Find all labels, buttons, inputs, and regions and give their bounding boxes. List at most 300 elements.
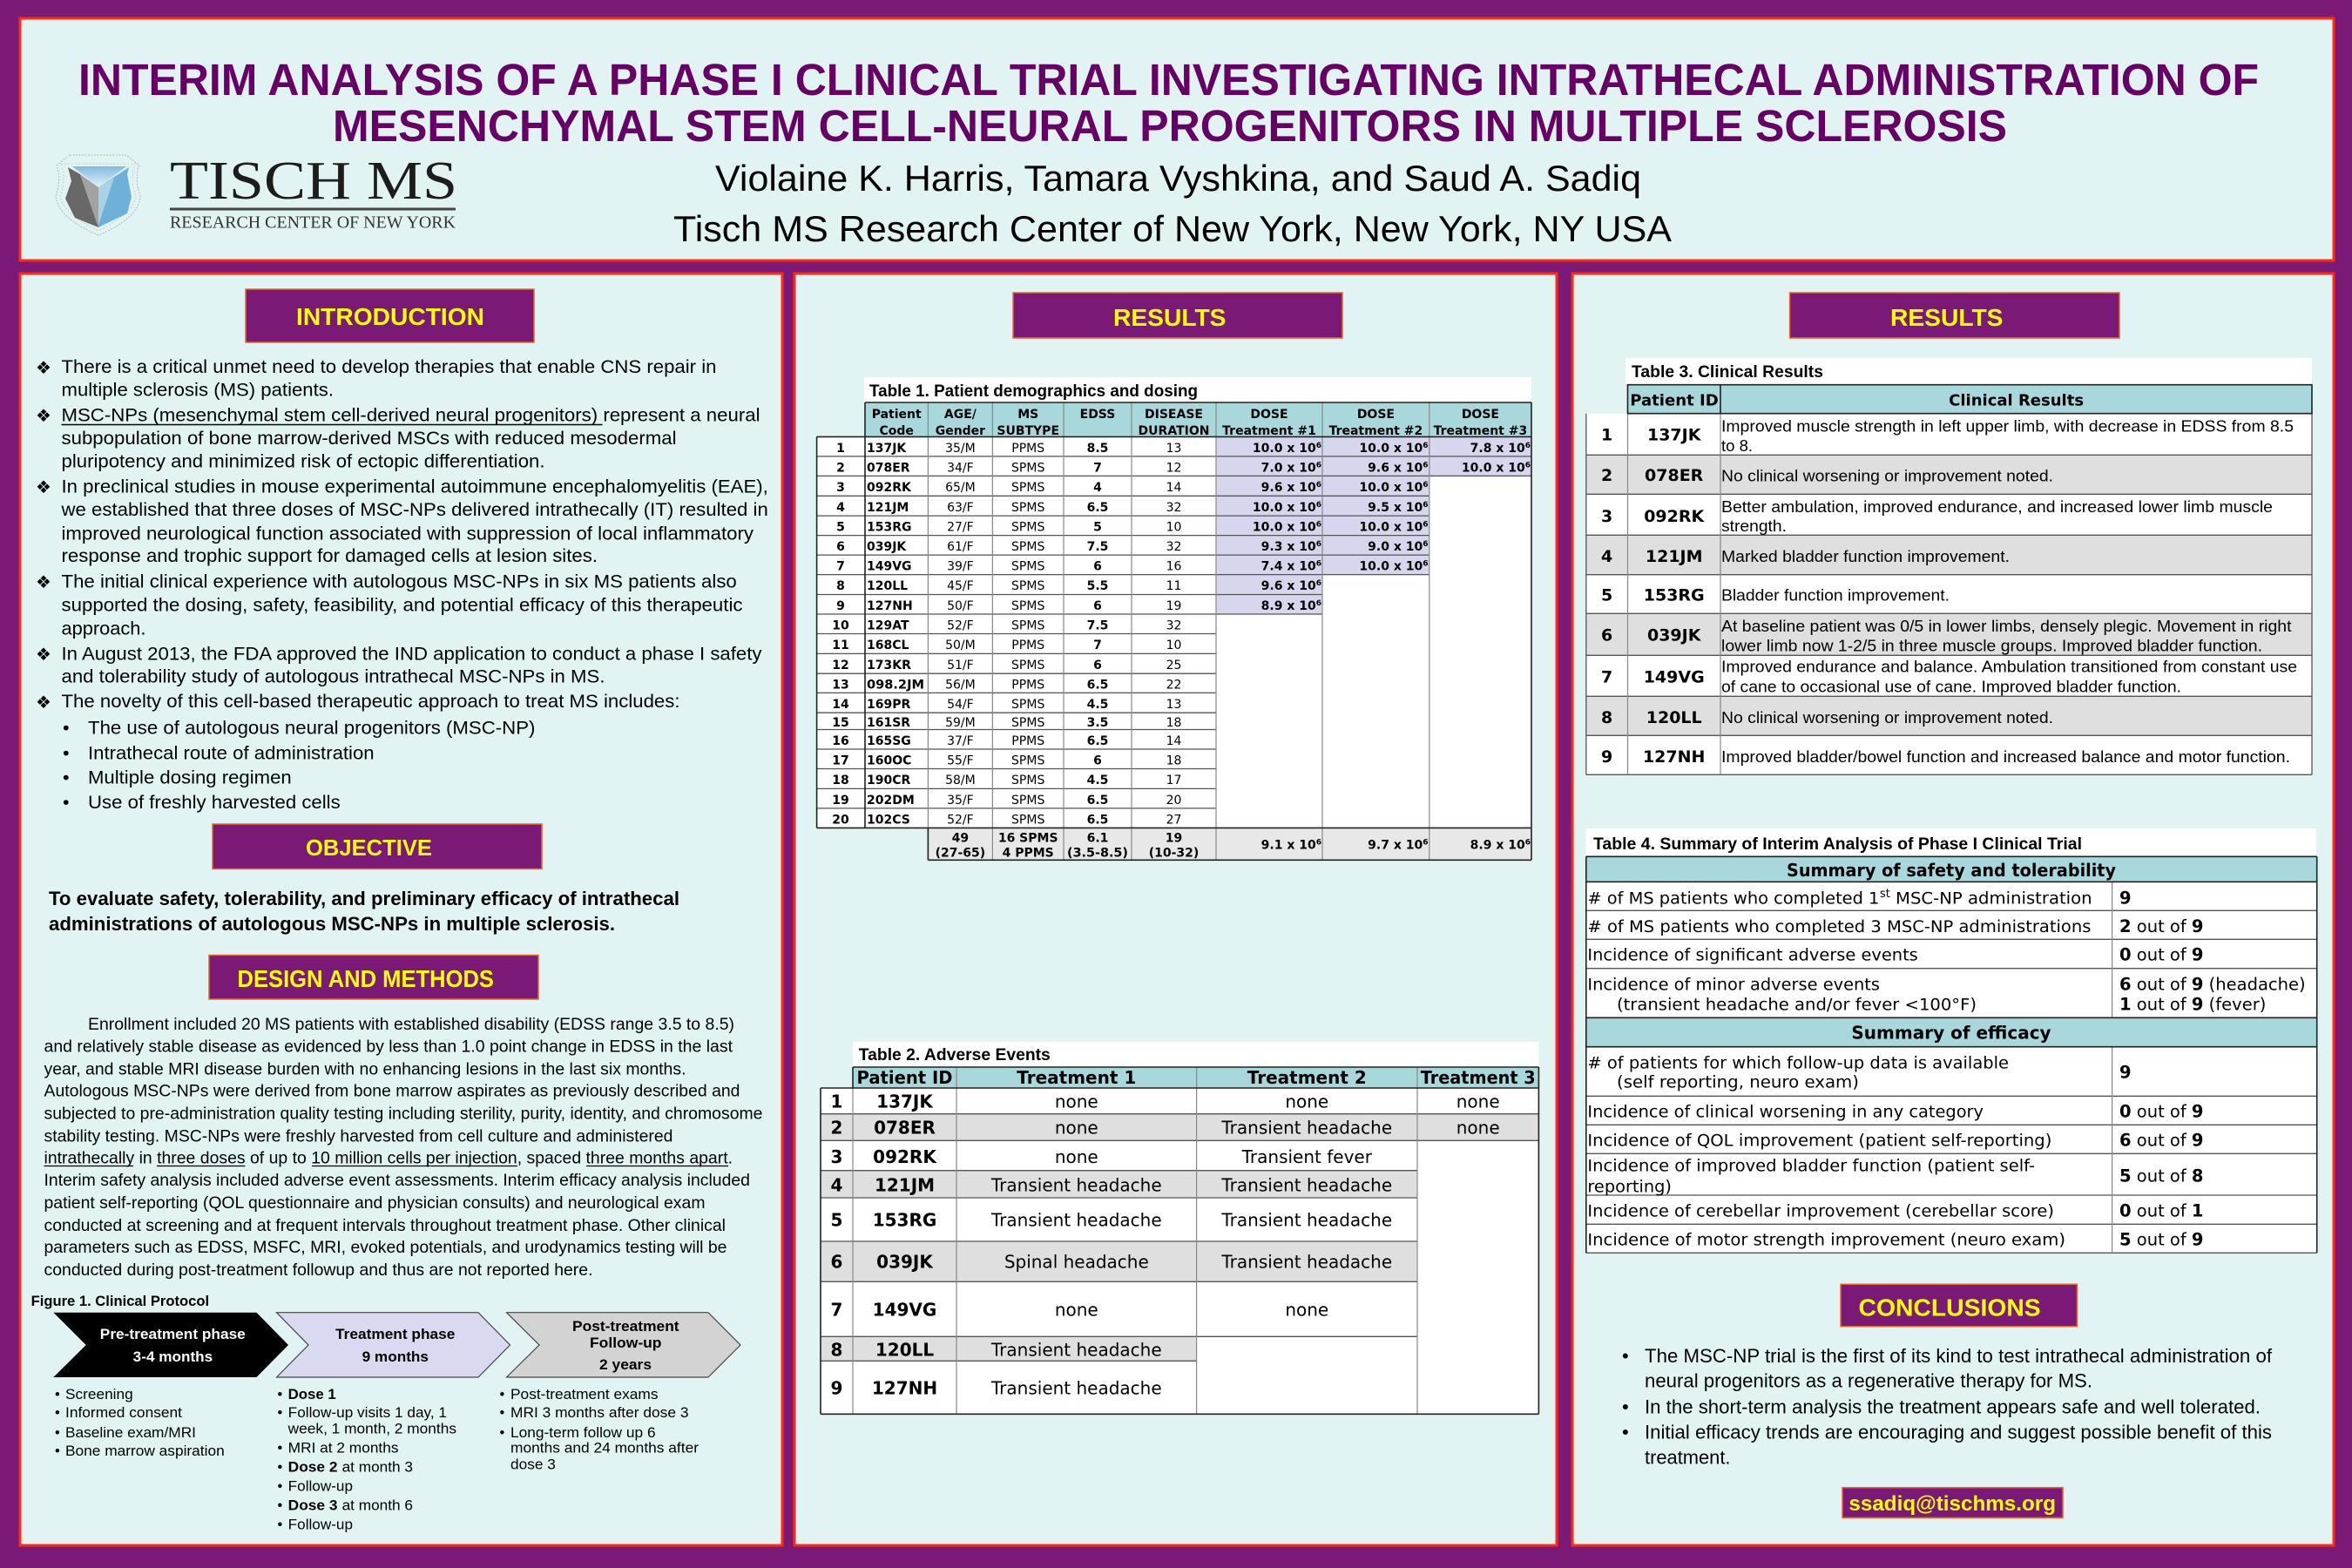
table 2 patient rows: 127NH bbox=[872, 1378, 937, 1399]
table 1 summary row: 6 bbox=[1316, 839, 1321, 848]
table 2 header row: Treatment 2 bbox=[1247, 1067, 1367, 1088]
table 1 summary row: 16 SPMS bbox=[998, 832, 1058, 846]
text block: introduction bullets: • bbox=[63, 767, 70, 787]
table 4: summary of interim analysis: Table 4. Summary of Interim Analysis of Phase I Clinical Trial bbox=[1593, 835, 2082, 854]
table 1 patient rows: 129AT bbox=[867, 618, 909, 632]
table 1 patient rows: 6 bbox=[1316, 481, 1321, 490]
table 1 patient rows: SPMS bbox=[1011, 579, 1044, 593]
table 1 patient rows: 22 bbox=[1166, 679, 1181, 693]
table 4 efficacy rows: Incidence of motor strength improvement (neuro exam) bbox=[1587, 1232, 2065, 1250]
table 1 patient rows: 7 bbox=[1093, 639, 1102, 652]
table 1 patient rows: 7 bbox=[836, 560, 845, 574]
text block: conclusions bbox=[1622, 1345, 2273, 1469]
table 4 efficacy rows: 5 out of 8 bbox=[2119, 1166, 2203, 1186]
table 3 patient ids: 3 bbox=[1601, 507, 1612, 526]
list: treatment steps: at month 6 bbox=[342, 1498, 413, 1514]
table 1 patient rows: SPMS bbox=[1011, 461, 1044, 475]
text block: conclusions: • bbox=[1622, 1396, 1629, 1418]
table 1 summary row: 9.7 x 10 bbox=[1368, 839, 1423, 853]
text block: conclusions: • bbox=[1622, 1422, 1629, 1443]
table 1 patient rows: 17 bbox=[1166, 774, 1181, 787]
table 1 header row: AGE/ bbox=[944, 408, 977, 422]
table 1 patient rows: 25 bbox=[1166, 659, 1181, 672]
table 1 patient rows: 6 bbox=[1316, 579, 1321, 588]
table 2 patient rows: none bbox=[1055, 1092, 1098, 1112]
text block: introduction bullets: Intrathecal route of administration bbox=[88, 742, 375, 763]
heading: design and methods bbox=[209, 955, 538, 999]
text block: introduction bullets: supported the dosing, safety, feasibility, and potential efficacy of this therapeutic bbox=[61, 594, 743, 615]
table 1 patient rows: 5 bbox=[836, 521, 845, 535]
table 4 safety rows: st bbox=[1880, 888, 1890, 901]
list: pre-treatment steps: • bbox=[55, 1443, 60, 1459]
table 4 efficacy rows: Incidence of QOL improvement (patient self-reporting) bbox=[1587, 1132, 2051, 1151]
text block: introduction bullets: improved neurological function associated with suppression of local inflammatory bbox=[61, 523, 754, 544]
table 2 patient rows: 4 bbox=[831, 1175, 842, 1196]
table 1 patient rows: 6 bbox=[1093, 599, 1102, 613]
text block: design and methods: patient self-reporting (QOL questionnaire and physician consults) and neurological exam bbox=[44, 1193, 706, 1213]
table 1 patient rows: 10 bbox=[832, 618, 849, 632]
table 1 patient rows: 56/M bbox=[945, 679, 976, 693]
logo wordmark: TISCH MS bbox=[170, 152, 457, 211]
table 1 header row: DURATION bbox=[1139, 424, 1209, 438]
authors: Violaine K. Harris, Tamara Vyshkina, and Saud A. Sadiq bbox=[715, 158, 1641, 199]
table 2 patient rows: 121JM bbox=[875, 1175, 935, 1196]
table 3 clinical result text: to 8. bbox=[1721, 436, 1753, 455]
table 1 patient rows: 6 bbox=[1316, 599, 1321, 608]
text block: introduction bullets: approach. bbox=[61, 618, 146, 639]
table 1 patient rows: 19 bbox=[832, 794, 849, 808]
table 1 patient rows: 17 bbox=[832, 754, 849, 768]
heading: introduction: INTRODUCTION bbox=[296, 303, 484, 330]
table 1 patient rows: 098.2JM bbox=[867, 679, 924, 693]
heading: results bbox=[1790, 293, 2119, 338]
arrow: pre-treatment phase bbox=[53, 1313, 288, 1377]
table 1 patient rows: 9.6 x 10 bbox=[1261, 579, 1316, 593]
table 1 summary row: 49 bbox=[952, 832, 969, 846]
table 3: clinical results bbox=[1586, 358, 2312, 774]
table 1 patient rows: 32 bbox=[1166, 618, 1181, 632]
table 1 patient rows: 6 bbox=[1093, 560, 1102, 574]
text block: introduction bullets: ❖ bbox=[36, 357, 51, 378]
table 1 patient rows: 8.5 bbox=[1087, 442, 1108, 456]
table 1 patient rows: 32 bbox=[1166, 540, 1181, 554]
table 1 patient rows: 168CL bbox=[867, 639, 909, 652]
table 3 clinical result text: No clinical worsening or improvement noted. bbox=[1721, 467, 2053, 485]
arrow: post-treatment follow-up: 2 years bbox=[599, 1357, 652, 1373]
table 1 patient rows: 5.5 bbox=[1087, 579, 1108, 593]
table 1 patient rows: 078ER bbox=[867, 461, 910, 475]
table 1 patient rows: 3.5 bbox=[1087, 716, 1108, 730]
table 3 patient ids: 092RK bbox=[1644, 507, 1705, 526]
table 2: adverse events bbox=[821, 1042, 1538, 1414]
table 1 summary row: 6 bbox=[1423, 839, 1429, 848]
table 1 patient rows: 58/M bbox=[945, 774, 976, 787]
table 1 header row: DOSE bbox=[1462, 408, 1499, 422]
table 1 header row: Gender bbox=[936, 424, 985, 438]
table 1 patient rows: 7.0 x 10 bbox=[1261, 461, 1316, 475]
table 3 clinical result text bbox=[1721, 417, 2297, 766]
table 1 patient rows: 9 bbox=[836, 599, 845, 613]
table 1 header row: Treatment #1 bbox=[1222, 424, 1316, 438]
table 2 patient rows: 1 bbox=[831, 1092, 842, 1112]
text block: introduction bullets: The initial clinical experience with autologous MSC-NPs in six MS patients also bbox=[61, 571, 737, 591]
table 1 patient rows: 15 bbox=[832, 716, 849, 730]
table 1 header row: Patient bbox=[872, 408, 922, 422]
table 1 patient rows: PPMS bbox=[1011, 734, 1044, 748]
list: treatment steps: • bbox=[277, 1387, 282, 1402]
text block: conclusions: The MSC-NP trial is the first of its kind to test intrathecal administration of bbox=[1645, 1345, 2273, 1367]
table 3 patient ids: 039JK bbox=[1647, 626, 1702, 645]
table 1 patient rows: 6.5 bbox=[1087, 734, 1108, 748]
table 4 safety rows: 2 out of 9 bbox=[2119, 916, 2203, 936]
table 4 efficacy rows: reporting) bbox=[1587, 1178, 1672, 1196]
table 1 patient rows: 16 bbox=[1166, 560, 1181, 574]
table 1 patient rows: 7.5 bbox=[1087, 618, 1108, 632]
table 1 patient rows: SPMS bbox=[1011, 774, 1044, 787]
table 3 patient ids: 127NH bbox=[1643, 747, 1705, 767]
table 3 header row: Clinical Results bbox=[1949, 392, 2084, 410]
table 1 header row: Treatment #2 bbox=[1329, 424, 1423, 438]
contact email: ssadiq@tischms.org bbox=[1848, 1492, 2056, 1516]
table 2 patient rows: Transient headache bbox=[1220, 1252, 1392, 1273]
table 2 patient rows: 153RG bbox=[873, 1210, 936, 1231]
table 2 patient rows: Transient headache bbox=[1220, 1210, 1392, 1231]
table 2 patient rows: 149VG bbox=[873, 1300, 936, 1321]
table 1 patient rows: 160OC bbox=[867, 754, 911, 768]
table 1 patient rows: 6 bbox=[1316, 501, 1321, 510]
table 3 header row: Patient ID bbox=[1630, 392, 1719, 410]
table 1 patient rows: 14 bbox=[1166, 481, 1181, 495]
table 1 patient rows: 18 bbox=[832, 774, 849, 787]
table 4 safety rows: 0 out of 9 bbox=[2119, 945, 2203, 965]
text block: introduction bullets: In preclinical studies in mouse experimental autoimmune encephalomyelitis (EAE), bbox=[61, 476, 768, 497]
table 1 patient rows: 10.0 x 10 bbox=[1359, 442, 1423, 456]
table 1 patient rows: 9.0 x 10 bbox=[1368, 540, 1423, 554]
table 1 header row: EDSS bbox=[1080, 408, 1115, 422]
text block: introduction bullets: The novelty of this cell-based therapeutic approach to treat MS includes: bbox=[61, 691, 679, 712]
text block: design and methods: subjected to pre-administration quality testing including sterility, purity, identity, and chromosome bbox=[44, 1105, 763, 1124]
table 1 patient rows: 14 bbox=[1166, 734, 1181, 748]
logo wordmark: RESEARCH CENTER OF NEW YORK bbox=[170, 214, 456, 232]
table 1 patient rows: 27/F bbox=[947, 521, 974, 535]
text block: introduction bullets bbox=[36, 356, 768, 813]
list: treatment steps: MRI at 2 months bbox=[288, 1441, 399, 1456]
text block: introduction bullets: There is a critical unmet need to develop therapies that enable CNS repair in bbox=[61, 356, 716, 377]
table 2 patient rows: 5 bbox=[831, 1210, 842, 1231]
table 1 patient rows: 34/F bbox=[947, 461, 974, 475]
list: post-treatment steps: dose 3 bbox=[510, 1457, 556, 1473]
table 1 patient rows: 13 bbox=[832, 679, 849, 693]
table 1 patient rows: 5 bbox=[1093, 521, 1102, 535]
table 1 patient rows: 37/F bbox=[947, 734, 974, 748]
table 1 patient rows: 7.5 bbox=[1087, 540, 1108, 554]
list: post-treatment steps bbox=[500, 1387, 700, 1473]
list: treatment steps: Follow-up bbox=[288, 1517, 353, 1533]
list: post-treatment steps: • bbox=[500, 1425, 505, 1441]
table 1 patient rows: 50/F bbox=[947, 599, 974, 613]
text block: design and methods: conducted at screening and at frequent intervals throughout treatment phase. Other clinical bbox=[44, 1216, 726, 1235]
heading: conclusions: CONCLUSIONS bbox=[1859, 1294, 2041, 1321]
table 1 patient rows: 039JK bbox=[867, 540, 907, 554]
table 1 patient rows: 9.3 x 10 bbox=[1261, 540, 1316, 554]
table 1 patient rows: 6 bbox=[1316, 461, 1321, 470]
arrow: treatment phase bbox=[277, 1313, 510, 1377]
text block: introduction bullets: and tolerability study of autologous intrathecal MSC-NPs in MS. bbox=[61, 666, 605, 686]
table 3 patient ids: 9 bbox=[1601, 747, 1612, 767]
table 4 section heading: safety: Summary of safety and tolerability bbox=[1787, 860, 2116, 881]
table 3 clinical result text: of cane to occasional use of cane. Improved bladder function. bbox=[1721, 678, 2181, 696]
table 3: clinical results: Table 3. Clinical Results bbox=[1632, 363, 1823, 382]
table 1 patient rows: 2 bbox=[836, 461, 845, 475]
table 1 patient rows: 52/F bbox=[947, 618, 974, 632]
table 4 safety rows: # of MS patients who completed 1 bbox=[1587, 889, 1879, 908]
title: INTERIM ANALYSIS OF A PHASE I CLINICAL TRIAL INVESTIGATING INTRATHECAL ADMINISTRATION OF bbox=[78, 55, 2259, 105]
list: post-treatment steps: • bbox=[500, 1387, 505, 1402]
list: post-treatment steps: Post-treatment exams bbox=[510, 1387, 659, 1402]
table 1 patient rows: SPMS bbox=[1011, 540, 1044, 554]
table 4 efficacy rows: Incidence of cerebellar improvement (cerebellar score) bbox=[1587, 1203, 2054, 1221]
table 1 patient rows: 10 bbox=[1166, 639, 1181, 652]
table 1 header row: Code bbox=[879, 424, 914, 438]
table 1 patient rows: 10.0 x 10 bbox=[1359, 560, 1423, 574]
table 1 summary row: 19 bbox=[1166, 832, 1182, 846]
table 1 patient rows: 6 bbox=[1316, 521, 1321, 530]
table 4 safety rows: (transient headache and/or fever <100°F) bbox=[1617, 996, 1977, 1014]
text block: conclusions: • bbox=[1622, 1345, 1629, 1367]
text block: conclusions: treatment. bbox=[1645, 1447, 1730, 1469]
arrow: post-treatment follow-up: Follow-up bbox=[590, 1335, 662, 1351]
text block: design and methods bbox=[44, 1015, 763, 1280]
table 1 patient rows: 10 bbox=[1166, 521, 1181, 535]
arrow: pre-treatment phase: Pre-treatment phase bbox=[100, 1327, 246, 1342]
table 1 summary row bbox=[936, 832, 1531, 860]
table 2 patient rows: none bbox=[1456, 1118, 1500, 1139]
table 1 summary row: 6 bbox=[1525, 839, 1531, 848]
table 1 patient rows: 127NH bbox=[867, 599, 913, 613]
list: pre-treatment steps: Baseline exam/MRI bbox=[65, 1425, 196, 1441]
table 1 patient rows: 4.5 bbox=[1087, 774, 1108, 787]
table 4 efficacy rows: Incidence of improved bladder function (patient self- bbox=[1587, 1158, 2035, 1176]
table 1 patient rows: 6 bbox=[836, 540, 845, 554]
heading: introduction bbox=[246, 289, 534, 342]
text block: introduction bullets: ❖ bbox=[36, 692, 51, 713]
list: pre-treatment steps: Bone marrow aspiration bbox=[65, 1443, 225, 1459]
table 2 patient rows: Transient headache bbox=[990, 1175, 1162, 1196]
table 1 patient rows: 4 bbox=[836, 501, 845, 515]
table 3 patient ids: 078ER bbox=[1645, 466, 1704, 485]
table 1 patient rows: 153RG bbox=[867, 521, 911, 535]
table 2 patient rows: Transient headache bbox=[1220, 1118, 1392, 1139]
table 1: patient demographics and dosing bbox=[817, 377, 1531, 860]
table 1 patient rows: 6 bbox=[1525, 461, 1531, 470]
logo wordmark bbox=[170, 152, 457, 232]
arrow: pre-treatment phase: 3-4 months bbox=[133, 1349, 213, 1365]
table 4 efficacy rows: 9 bbox=[2119, 1062, 2132, 1082]
table 3 clinical result text: At baseline patient was 0/5 in lower limbs, densely plegic. Movement in right bbox=[1721, 617, 2291, 635]
table 4 efficacy rows: Incidence of clinical worsening in any category bbox=[1587, 1104, 1984, 1122]
table 3 patient ids: 6 bbox=[1601, 626, 1612, 645]
table 1 patient rows: 6 bbox=[1423, 442, 1429, 450]
table 1 patient rows: 10.0 x 10 bbox=[1253, 521, 1316, 535]
table 2 patient rows: Transient fever bbox=[1241, 1146, 1373, 1167]
list: post-treatment steps: Long-term follow up 6 bbox=[510, 1425, 656, 1441]
list: treatment steps: Dose 1 bbox=[288, 1387, 336, 1402]
table 1 patient rows: 10.0 x 10 bbox=[1359, 521, 1423, 535]
text block: introduction bullets: • bbox=[63, 718, 70, 739]
table 1 patient rows: 8 bbox=[836, 579, 845, 593]
table 1 patient rows: 13 bbox=[1166, 442, 1181, 456]
table 1 patient rows: 6 bbox=[1316, 540, 1321, 549]
table 1 patient rows: 55/F bbox=[947, 754, 974, 768]
text block: objective bbox=[49, 888, 679, 935]
table 1 patient rows bbox=[832, 442, 1531, 827]
table 3 patient ids: 4 bbox=[1601, 547, 1612, 566]
table 1 patient rows: 6.5 bbox=[1087, 813, 1108, 827]
table 1 patient rows: 7.4 x 10 bbox=[1261, 560, 1316, 574]
list: pre-treatment steps: • bbox=[55, 1387, 60, 1402]
list: treatment steps: Follow-up visits 1 day, 1 bbox=[288, 1405, 447, 1421]
table 2 patient rows: 8 bbox=[831, 1340, 842, 1361]
table 2 patient rows: none bbox=[1285, 1300, 1328, 1321]
table 4 safety rows: # of MS patients who completed 3 MSC-NP administrations bbox=[1587, 918, 2091, 936]
table 1 patient rows: 19 bbox=[1166, 599, 1181, 613]
table 1 patient rows: 202DM bbox=[867, 794, 915, 808]
list: post-treatment steps: • bbox=[500, 1405, 505, 1421]
table 1 header row: DOSE bbox=[1250, 408, 1288, 422]
table 1 patient rows: 35/F bbox=[947, 794, 974, 808]
table 2 patient rows: Transient headache bbox=[990, 1378, 1162, 1399]
text block: design and methods: intrathecally in three doses of up to 10 million cells per injection, spaced three months apart. bbox=[44, 1148, 733, 1167]
table 1 patient rows: 6 bbox=[1423, 521, 1429, 530]
table 2 patient rows: 078ER bbox=[874, 1118, 936, 1139]
panel: left column bbox=[20, 274, 782, 1545]
table 1: patient demographics and dosing: Table 1. Patient demographics and dosing bbox=[869, 382, 1198, 401]
table 1 summary row: 9.1 x 10 bbox=[1261, 839, 1316, 853]
text block: introduction bullets: In August 2013, the FDA approved the IND application to conduct a phase I safety bbox=[61, 643, 762, 664]
table 1 patient rows: 32 bbox=[1166, 501, 1181, 515]
table 1 header row: MS bbox=[1017, 408, 1038, 422]
table 1 patient rows: 102CS bbox=[867, 813, 910, 827]
list: treatment steps: Follow-up bbox=[288, 1479, 353, 1495]
table 1 patient rows: 6 bbox=[1093, 754, 1102, 768]
table 1 patient rows: 13 bbox=[1166, 698, 1181, 712]
table 1 header row bbox=[872, 408, 1527, 438]
table 1 patient rows: SPMS bbox=[1011, 560, 1044, 574]
table 3 patient ids: 120LL bbox=[1646, 708, 1702, 727]
text block: introduction bullets: ❖ bbox=[36, 476, 51, 497]
table 2 patient rows: Transient headache bbox=[1220, 1175, 1392, 1196]
table 3 clinical result text: No clinical worsening or improvement noted. bbox=[1721, 708, 2053, 727]
table 1 patient rows: 8.9 x 10 bbox=[1261, 599, 1316, 613]
table 3 clinical result text: Bladder function improvement. bbox=[1721, 586, 1950, 605]
table 1 summary row: 4 PPMS bbox=[1003, 846, 1054, 860]
table 1 patient rows: 6 bbox=[1316, 442, 1321, 450]
table 1 patient rows: 59/M bbox=[945, 716, 976, 730]
heading: results bbox=[1013, 293, 1342, 338]
table 2 patient rows: 3 bbox=[831, 1146, 842, 1167]
table 3 patient ids: 8 bbox=[1601, 708, 1612, 727]
table 2 patient rows: none bbox=[1285, 1092, 1328, 1112]
table 1 patient rows: 18 bbox=[1166, 716, 1181, 730]
table 1 patient rows: SPMS bbox=[1011, 813, 1044, 827]
table 2 patient rows: 092RK bbox=[873, 1146, 937, 1167]
table 1 patient rows: 6 bbox=[1423, 481, 1429, 490]
panel: header bbox=[20, 18, 2334, 260]
table 1 patient rows: 51/F bbox=[947, 659, 974, 672]
text block: design and methods: parameters such as EDSS, MSFC, MRI, evoked potentials, and urodynamics testing will be bbox=[44, 1238, 727, 1257]
table 4 section heading: efficacy: Summary of efficacy bbox=[1851, 1022, 2051, 1043]
table 1 patient rows: 12 bbox=[1166, 461, 1181, 475]
table 4 efficacy rows: 6 out of 9 bbox=[2119, 1131, 2203, 1151]
table 4 efficacy rows: 0 out of 9 bbox=[2119, 1102, 2203, 1122]
table 1 patient rows: 12 bbox=[832, 659, 849, 672]
table 1 patient rows: 65/M bbox=[945, 481, 976, 495]
table 2 patient rows: 2 bbox=[831, 1118, 842, 1139]
list: treatment steps: • bbox=[277, 1460, 282, 1476]
table 1 patient rows: SPMS bbox=[1011, 659, 1044, 672]
list: post-treatment steps: MRI 3 months after dose 3 bbox=[510, 1405, 688, 1421]
table 4 safety rows: Incidence of minor adverse events bbox=[1587, 977, 1880, 995]
table 1 summary row: (10-32) bbox=[1149, 846, 1199, 860]
text block: conclusions: In the short-term analysis the treatment appears safe and well tolerated. bbox=[1645, 1396, 2261, 1418]
table 4 efficacy rows: 5 out of 9 bbox=[2119, 1230, 2203, 1250]
list: treatment steps: • bbox=[277, 1441, 282, 1456]
text block: introduction bullets: ❖ bbox=[36, 571, 51, 592]
figure caption: Figure 1. Clinical Protocol bbox=[31, 1294, 209, 1309]
list: treatment steps: week, 1 month, 2 months bbox=[287, 1422, 456, 1437]
table 4 safety rows: 9 bbox=[2119, 888, 2132, 908]
text block: introduction bullets: Use of freshly harvested cells bbox=[88, 792, 341, 813]
table 1 patient rows: 7 bbox=[1093, 461, 1102, 475]
table 3 patient ids: 5 bbox=[1601, 586, 1612, 605]
text block: design and methods: stability testing. MSC-NPs were freshly harvested from cell culture and administered bbox=[44, 1127, 672, 1146]
table 2 patient rows: none bbox=[1055, 1118, 1098, 1139]
table 1 patient rows: 9.6 x 10 bbox=[1261, 481, 1316, 495]
table 1 patient rows: 6.5 bbox=[1087, 501, 1108, 515]
table 1 patient rows: 9.5 x 10 bbox=[1368, 501, 1423, 515]
table 2 patient rows: 120LL bbox=[875, 1340, 934, 1361]
table 4 safety rows: Incidence of significant adverse events bbox=[1587, 947, 1918, 965]
table 1 patient rows: 6 bbox=[1423, 461, 1429, 470]
text block: objective: administrations of autologous MSC-NPs in multiple sclerosis. bbox=[49, 913, 615, 935]
list: treatment steps: at month 3 bbox=[342, 1460, 413, 1476]
table 2 header row: Patient ID bbox=[857, 1067, 953, 1088]
table 2: adverse events: Table 2. Adverse Events bbox=[859, 1046, 1051, 1064]
table 1 patient rows: 10.0 x 10 bbox=[1253, 442, 1316, 456]
table 1 patient rows: 63/F bbox=[947, 501, 974, 515]
table 1 patient rows: 10.0 x 10 bbox=[1253, 501, 1316, 515]
text block: introduction bullets: Multiple dosing regimen bbox=[88, 767, 292, 787]
table 1 patient rows: 1 bbox=[836, 442, 845, 456]
table 3 patient ids: 149VG bbox=[1644, 668, 1705, 687]
table 3 clinical result text: Better ambulation, improved endurance, and increased lower limb muscle bbox=[1721, 497, 2273, 516]
arrow: treatment phase: 9 months bbox=[362, 1349, 429, 1365]
table 1 summary row: 6.1 bbox=[1087, 832, 1108, 846]
table 1 patient rows: 137JK bbox=[867, 442, 907, 456]
table 1 patient rows: 39/F bbox=[947, 560, 974, 574]
text block: objective: To evaluate safety, tolerability, and preliminary efficacy of intrathecal bbox=[49, 888, 679, 909]
table 1 patient rows: 6 bbox=[1423, 560, 1429, 569]
table 2 patient rows: 7 bbox=[831, 1300, 842, 1321]
table 1 patient rows: 6 bbox=[1316, 560, 1321, 569]
table 1 patient rows: 092RK bbox=[867, 481, 912, 495]
title: MESENCHYMAL STEM CELL-NEURAL PROGENITORS IN MULTIPLE SCLEROSIS bbox=[333, 101, 2007, 151]
table 1 patient rows: PPMS bbox=[1011, 679, 1044, 693]
list: post-treatment steps: months and 24 months after bbox=[510, 1441, 700, 1456]
list: pre-treatment steps: Informed consent bbox=[65, 1405, 182, 1421]
text block: introduction bullets: ❖ bbox=[36, 644, 51, 665]
table 4 safety rows: 6 out of 9 (headache) bbox=[2119, 975, 2306, 995]
